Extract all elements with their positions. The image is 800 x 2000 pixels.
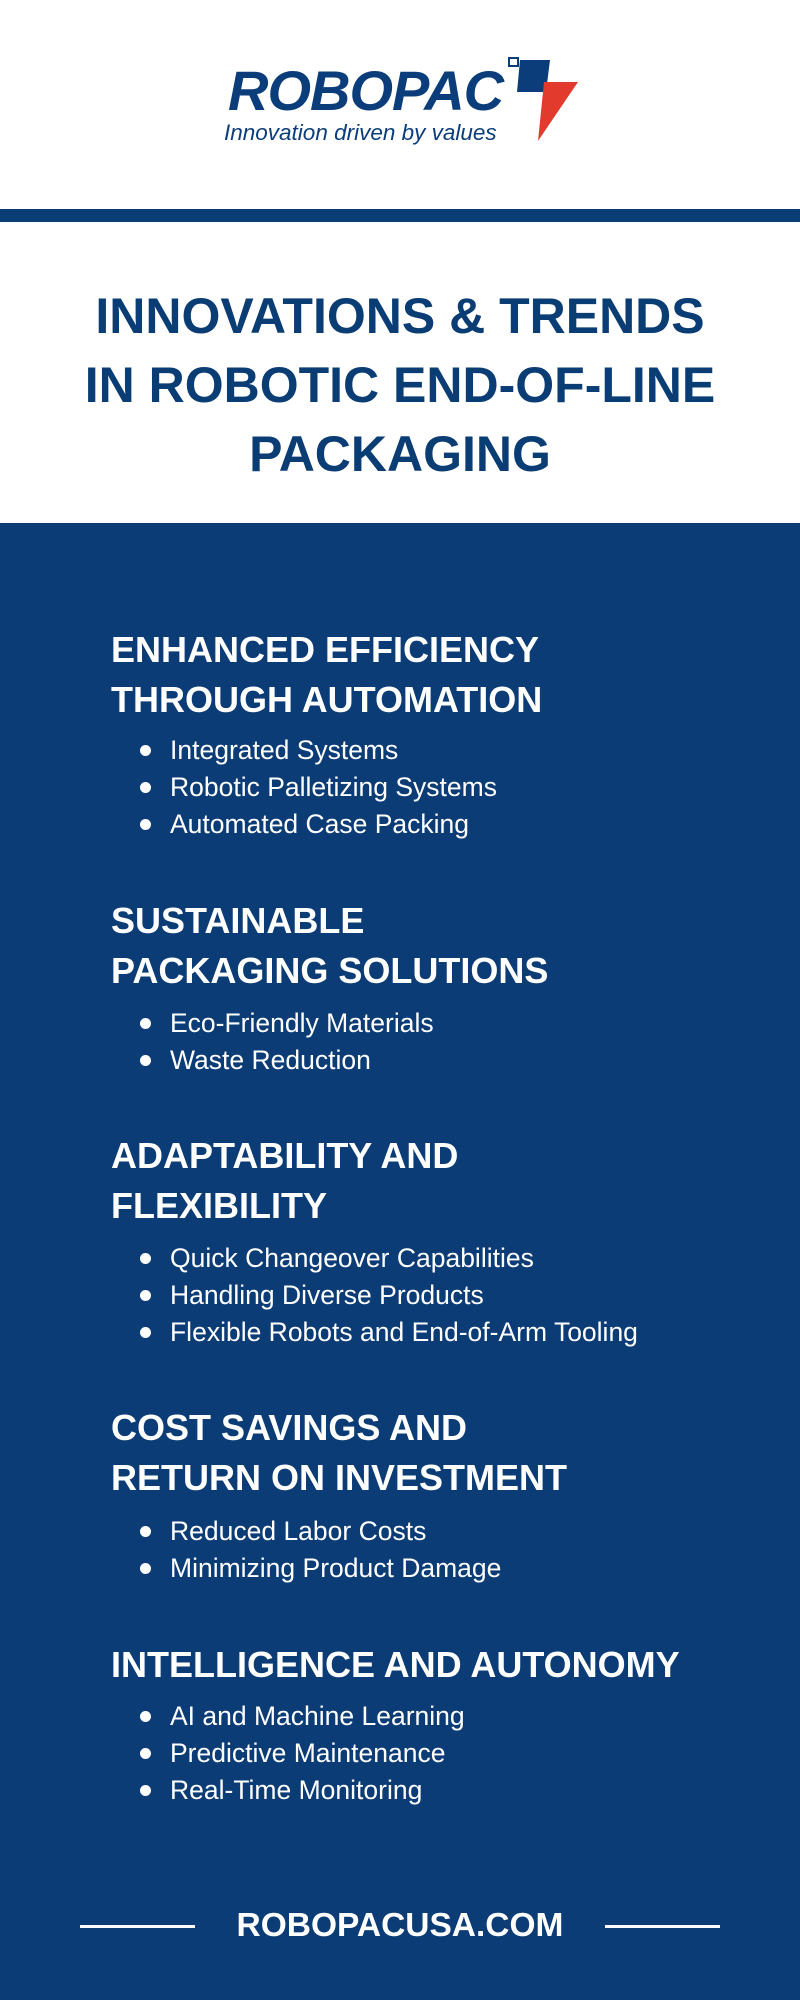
heading 4 [111, 1407, 567, 1498]
heading 4: COST SAVINGS AND [111, 1407, 467, 1448]
title: IN ROBOTIC END-OF-LINE [85, 357, 715, 413]
bullets 3: Quick Changeover Capabilities [170, 1243, 534, 1273]
bullets 1: Automated Case Packing [170, 809, 469, 839]
heading 3 [111, 1135, 458, 1226]
section 4 [111, 1407, 567, 1583]
title: INNOVATIONS & TRENDS [95, 288, 705, 344]
bullets 1: Robotic Palletizing Systems [170, 772, 497, 802]
logo tagline: Innovation driven by values [224, 120, 497, 145]
logo wordmark: ROBOPAC [228, 59, 503, 122]
bullets 2 [140, 1008, 434, 1075]
heading 4: RETURN ON INVESTMENT [111, 1457, 567, 1498]
bullets 5 [140, 1701, 465, 1805]
bullets 4: Reduced Labor Costs [170, 1516, 426, 1546]
footer [80, 1907, 720, 1944]
section 5 [111, 1644, 680, 1805]
bullets 1: Integrated Systems [170, 735, 398, 765]
heading 2: SUSTAINABLE [111, 900, 364, 941]
heading 1 [111, 629, 542, 720]
bullets 5: Predictive Maintenance [170, 1738, 445, 1768]
heading 5: INTELLIGENCE AND AUTONOMY [111, 1644, 680, 1685]
bullets 5: AI and Machine Learning [170, 1701, 465, 1731]
bullets 4: Minimizing Product Damage [170, 1553, 501, 1583]
bullets 4 [140, 1516, 501, 1583]
logo bolt icon [508, 57, 578, 141]
heading 1: THROUGH AUTOMATION [111, 679, 542, 720]
title [85, 288, 715, 482]
heading 1: ENHANCED EFFICIENCY [111, 629, 539, 670]
title: PACKAGING [249, 426, 551, 482]
bullets 3: Flexible Robots and End-of-Arm Tooling [170, 1317, 638, 1347]
bullets 1 [140, 735, 497, 839]
bullets 2: Eco-Friendly Materials [170, 1008, 434, 1038]
heading 2: PACKAGING SOLUTIONS [111, 950, 548, 991]
heading 2 [111, 900, 548, 991]
footer url: ROBOPACUSA.COM [237, 1907, 563, 1944]
section 2 [111, 900, 548, 1075]
bullets 3: Handling Diverse Products [170, 1280, 484, 1310]
logo [224, 57, 578, 145]
heading 3: FLEXIBILITY [111, 1185, 327, 1226]
divider bar [0, 209, 800, 222]
section 1 [111, 629, 542, 839]
bullets 5: Real-Time Monitoring [170, 1775, 422, 1805]
bullets 3 [140, 1243, 638, 1347]
bullets 2: Waste Reduction [170, 1045, 371, 1075]
main panel [0, 523, 800, 2000]
heading 3: ADAPTABILITY AND [111, 1135, 458, 1176]
section 3 [111, 1135, 638, 1347]
